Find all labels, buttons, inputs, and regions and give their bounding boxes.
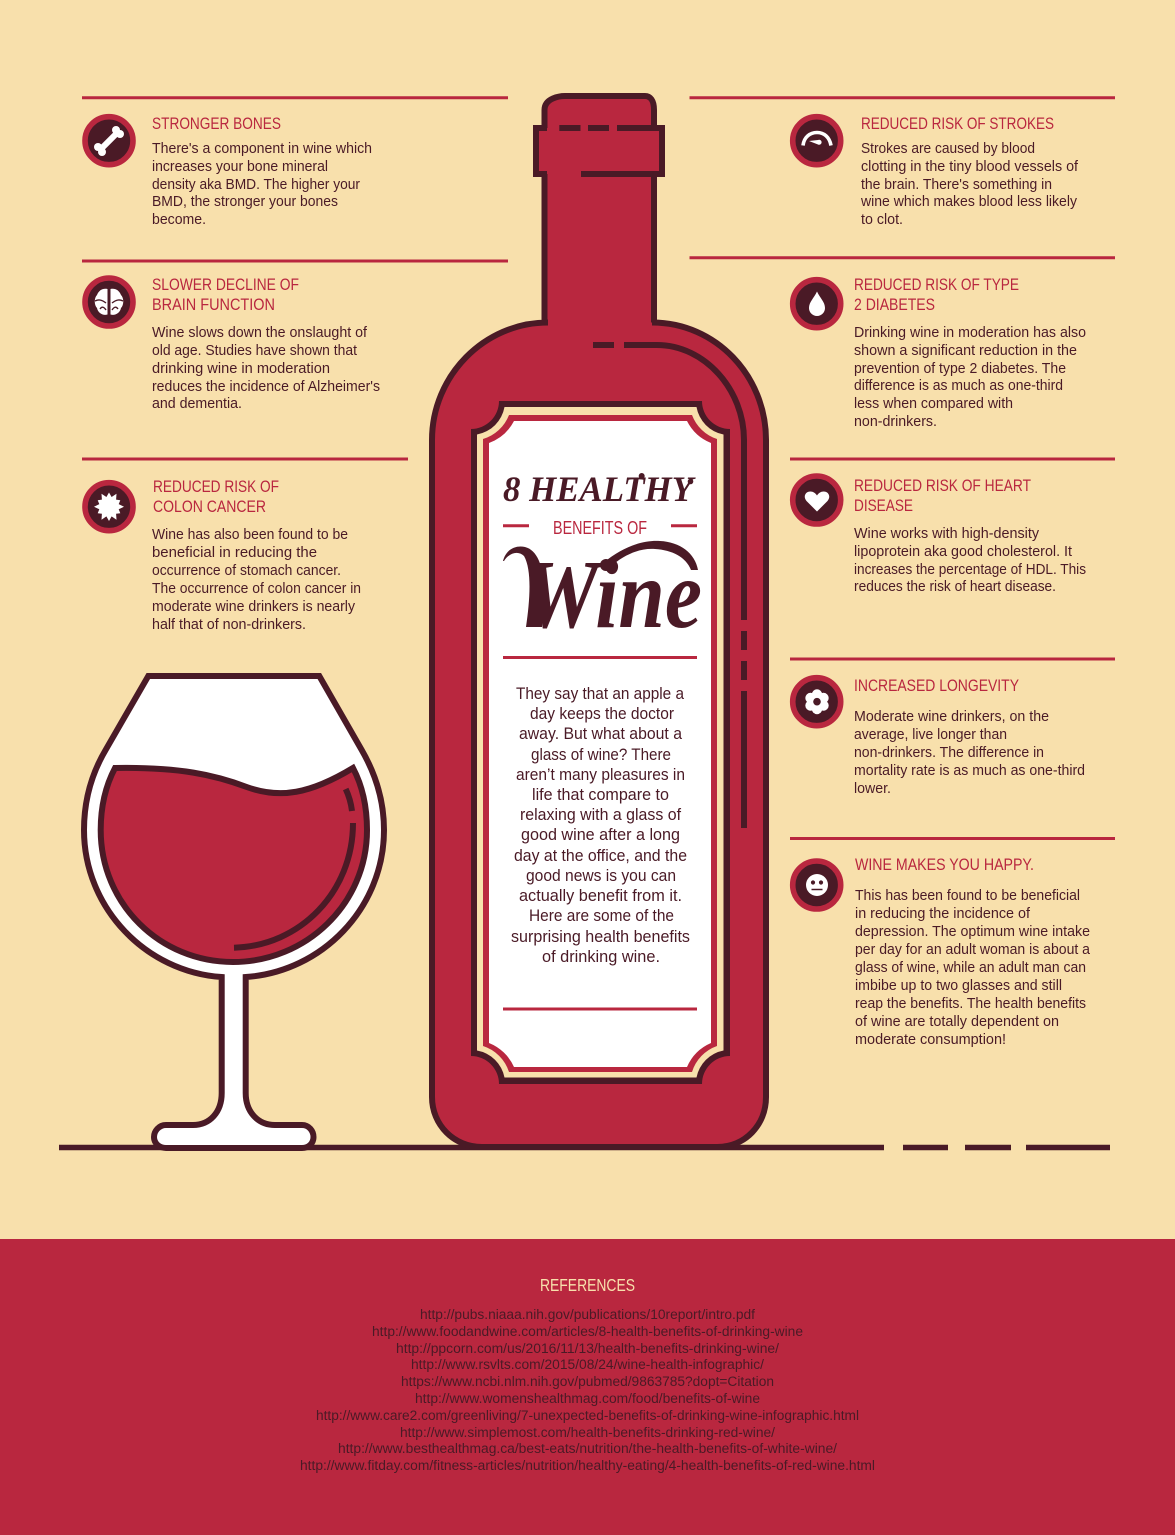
body text <box>152 527 361 633</box>
intro paragraph <box>511 684 690 966</box>
references list: http://www.simplemost.com/health-benefits-drinking-red-wine/ <box>400 1425 775 1440</box>
intro paragraph: actually benefit from it. <box>519 886 682 905</box>
glass outline <box>84 676 384 1148</box>
body text: less when compared with <box>854 396 1013 412</box>
body text: drinking wine in moderation <box>152 361 330 377</box>
wine bottle illustration <box>432 96 766 1147</box>
glass highlight <box>234 789 353 948</box>
bottle cap <box>536 128 662 174</box>
heading: WINE MAKES YOU HAPPY. <box>855 856 1034 874</box>
body text: difference is as much as one-third <box>854 378 1063 394</box>
heading: REDUCED RISK OF STROKES <box>861 115 1054 133</box>
icon: cancer cell <box>85 483 133 531</box>
references list: http://www.womenshealthmag.com/food/benefits-of-wine <box>415 1391 760 1406</box>
bottle highlight <box>593 345 744 828</box>
panel: reduced risk of type 2 diabetes <box>690 258 1115 430</box>
label divider bottom <box>503 1008 697 1010</box>
heading <box>854 477 1031 515</box>
title: 8 healthy: 8 HEALTHY <box>503 469 696 509</box>
body text <box>854 325 1086 430</box>
icon: heart <box>793 476 841 524</box>
body text: increases the percentage of HDL. This <box>854 562 1086 578</box>
references list: http://www.fitday.com/fitness-articles/nutrition/healthy-eating/4-health-benefits-of-red-wine.html <box>300 1458 875 1473</box>
panel: reduced risk of colon cancer <box>82 459 408 633</box>
body text: The occurrence of colon cancer in <box>152 581 361 597</box>
body text: imbibe up to two glasses and still <box>855 978 1062 994</box>
heading: REDUCED RISK OF TYPE <box>854 276 1019 294</box>
panel: slower decline of brain function <box>82 261 508 412</box>
body text: lower. <box>854 781 891 797</box>
body text: Drinking wine in moderation has also <box>854 325 1086 341</box>
icon: flower <box>793 678 841 726</box>
intro paragraph: good news is you can <box>526 866 676 885</box>
references list: http://www.care2.com/greenliving/7-unexpected-benefits-of-drinking-wine-infographic.html <box>316 1408 859 1423</box>
intro paragraph: They say that an apple a <box>516 684 684 703</box>
body text: half that of non-drinkers. <box>152 617 306 633</box>
heading: INCREASED LONGEVITY <box>854 677 1019 695</box>
icon: bone <box>85 117 133 165</box>
body text <box>854 526 1086 595</box>
body text <box>855 888 1091 1048</box>
body text <box>854 709 1085 797</box>
references list: http://www.besthealthmag.ca/best-eats/nutrition/the-health-benefits-of-white-wine/ <box>338 1441 837 1456</box>
body text: moderate wine drinkers is nearly <box>152 599 356 615</box>
body text: non-drinkers. <box>854 414 937 430</box>
intro paragraph: of drinking wine. <box>542 947 660 966</box>
icon: smiley <box>793 861 841 909</box>
heading: STRONGER BONES <box>152 115 281 133</box>
heading <box>152 276 299 314</box>
body text: to clot. <box>861 212 903 228</box>
body text: shown a significant reduction in the <box>854 343 1077 359</box>
bottle label <box>471 401 730 1084</box>
body text: BMD, the stronger your bones <box>152 194 338 210</box>
intro paragraph: day at the office, and the <box>514 846 687 865</box>
body text: lipoprotein aka good cholesterol. It <box>854 544 1072 560</box>
references list: http://www.rsvlts.com/2015/08/24/wine-health-infographic/ <box>411 1357 764 1372</box>
bottle outline <box>432 96 766 1147</box>
body text: density aka BMD. The higher your <box>152 177 360 193</box>
body text: per day for an adult woman is about a <box>855 942 1091 958</box>
body text: prevention of type 2 diabetes. The <box>854 361 1066 377</box>
body text: Moderate wine drinkers, on the <box>854 709 1049 725</box>
heading: DISEASE <box>854 497 913 515</box>
body text: old age. Studies have shown that <box>152 343 357 359</box>
icon: drop <box>793 280 841 328</box>
body text: Strokes are caused by blood <box>861 141 1035 157</box>
body text: become. <box>152 212 206 228</box>
wine glass illustration <box>84 676 384 1148</box>
heading: BRAIN FUNCTION <box>152 296 275 314</box>
body text: clotting in the tiny blood vessels of <box>861 159 1079 175</box>
icon: gauge <box>793 117 841 165</box>
body text: beneficial in reducing the <box>152 545 317 561</box>
intro paragraph: Here are some of the <box>529 906 674 925</box>
body text: reduces the incidence of Alzheimer's <box>152 379 380 395</box>
ground line <box>59 1145 1110 1150</box>
body text: average, live longer than <box>854 727 1007 743</box>
label divider top <box>503 656 697 659</box>
body text: occurrence of stomach cancer. <box>152 563 341 579</box>
body text: non-drinkers. The difference in <box>854 745 1044 761</box>
intro paragraph: surprising health benefits <box>511 927 690 946</box>
heading: COLON CANCER <box>153 498 266 516</box>
body text: depression. The optimum wine intake <box>855 924 1090 940</box>
body text: and dementia. <box>152 396 242 412</box>
panel: wine makes you happy <box>790 838 1115 1048</box>
references list: http://pubs.niaaa.nih.gov/publications/10report/intro.pdf <box>420 1307 755 1322</box>
body text <box>152 325 380 412</box>
heading: 2 DIABETES <box>854 296 935 314</box>
panel: reduced risk of strokes <box>690 98 1115 228</box>
wine in glass <box>101 768 367 962</box>
body text: There's a component in wine which <box>152 141 372 157</box>
body text: glass of wine, while an adult man can <box>855 960 1086 976</box>
body text: mortality rate is as much as one-third <box>854 763 1085 779</box>
intro paragraph: away. But what about a <box>519 724 683 743</box>
references list <box>300 1307 875 1473</box>
intro paragraph: glass of wine? There <box>531 745 671 764</box>
body text: wine which makes blood less likely <box>860 194 1078 210</box>
body text <box>152 141 372 228</box>
panel: stronger bones <box>82 98 508 228</box>
references heading: REFERENCES <box>540 1275 635 1295</box>
body text: the brain. There's something in <box>861 177 1052 193</box>
heading: SLOWER DECLINE OF <box>152 276 299 294</box>
body text: Wine has also been found to be <box>152 527 348 543</box>
references list: http://www.foodandwine.com/articles/8-health-benefits-of-drinking-wine <box>372 1324 803 1339</box>
intro paragraph: relaxing with a glass of <box>520 805 681 824</box>
intro paragraph: aren’t many pleasures in <box>516 765 685 784</box>
panel: increased longevity <box>790 659 1115 797</box>
body text <box>860 141 1079 228</box>
icon: brain <box>85 278 133 326</box>
body text: increases your bone mineral <box>152 159 328 175</box>
title: wine: Wine <box>524 541 702 649</box>
heading <box>153 478 279 516</box>
panel: reduced risk of heart disease <box>790 459 1115 595</box>
body text: moderate consumption! <box>855 1032 1006 1048</box>
heading <box>854 276 1019 314</box>
references list: http://ppcorn.com/us/2016/11/13/health-benefits-drinking-wine/ <box>396 1341 779 1356</box>
body text: reap the benefits. The health benefits <box>855 996 1086 1012</box>
body text: This has been found to be beneficial <box>855 888 1080 904</box>
subtitle: benefits of: BENEFITS OF <box>553 518 647 538</box>
body text: reduces the risk of heart disease. <box>854 579 1056 595</box>
body text: Wine slows down the onslaught of <box>152 325 368 341</box>
references list: https://www.ncbi.nlm.nih.gov/pubmed/9863785?dopt=Citation <box>401 1374 774 1389</box>
body text: Wine works with high-density <box>854 526 1040 542</box>
intro paragraph: day keeps the doctor <box>530 704 674 723</box>
body text: of wine are totally dependent on <box>855 1014 1059 1030</box>
panel: references footer <box>0 1239 1175 1535</box>
heading: REDUCED RISK OF HEART <box>854 477 1031 495</box>
bottle body <box>432 96 766 1147</box>
intro paragraph: life that compare to <box>532 785 669 804</box>
body text: in reducing the incidence of <box>855 906 1031 922</box>
intro paragraph: good wine after a long <box>521 825 680 844</box>
heading: REDUCED RISK OF <box>153 478 279 496</box>
label frame <box>471 401 730 1084</box>
